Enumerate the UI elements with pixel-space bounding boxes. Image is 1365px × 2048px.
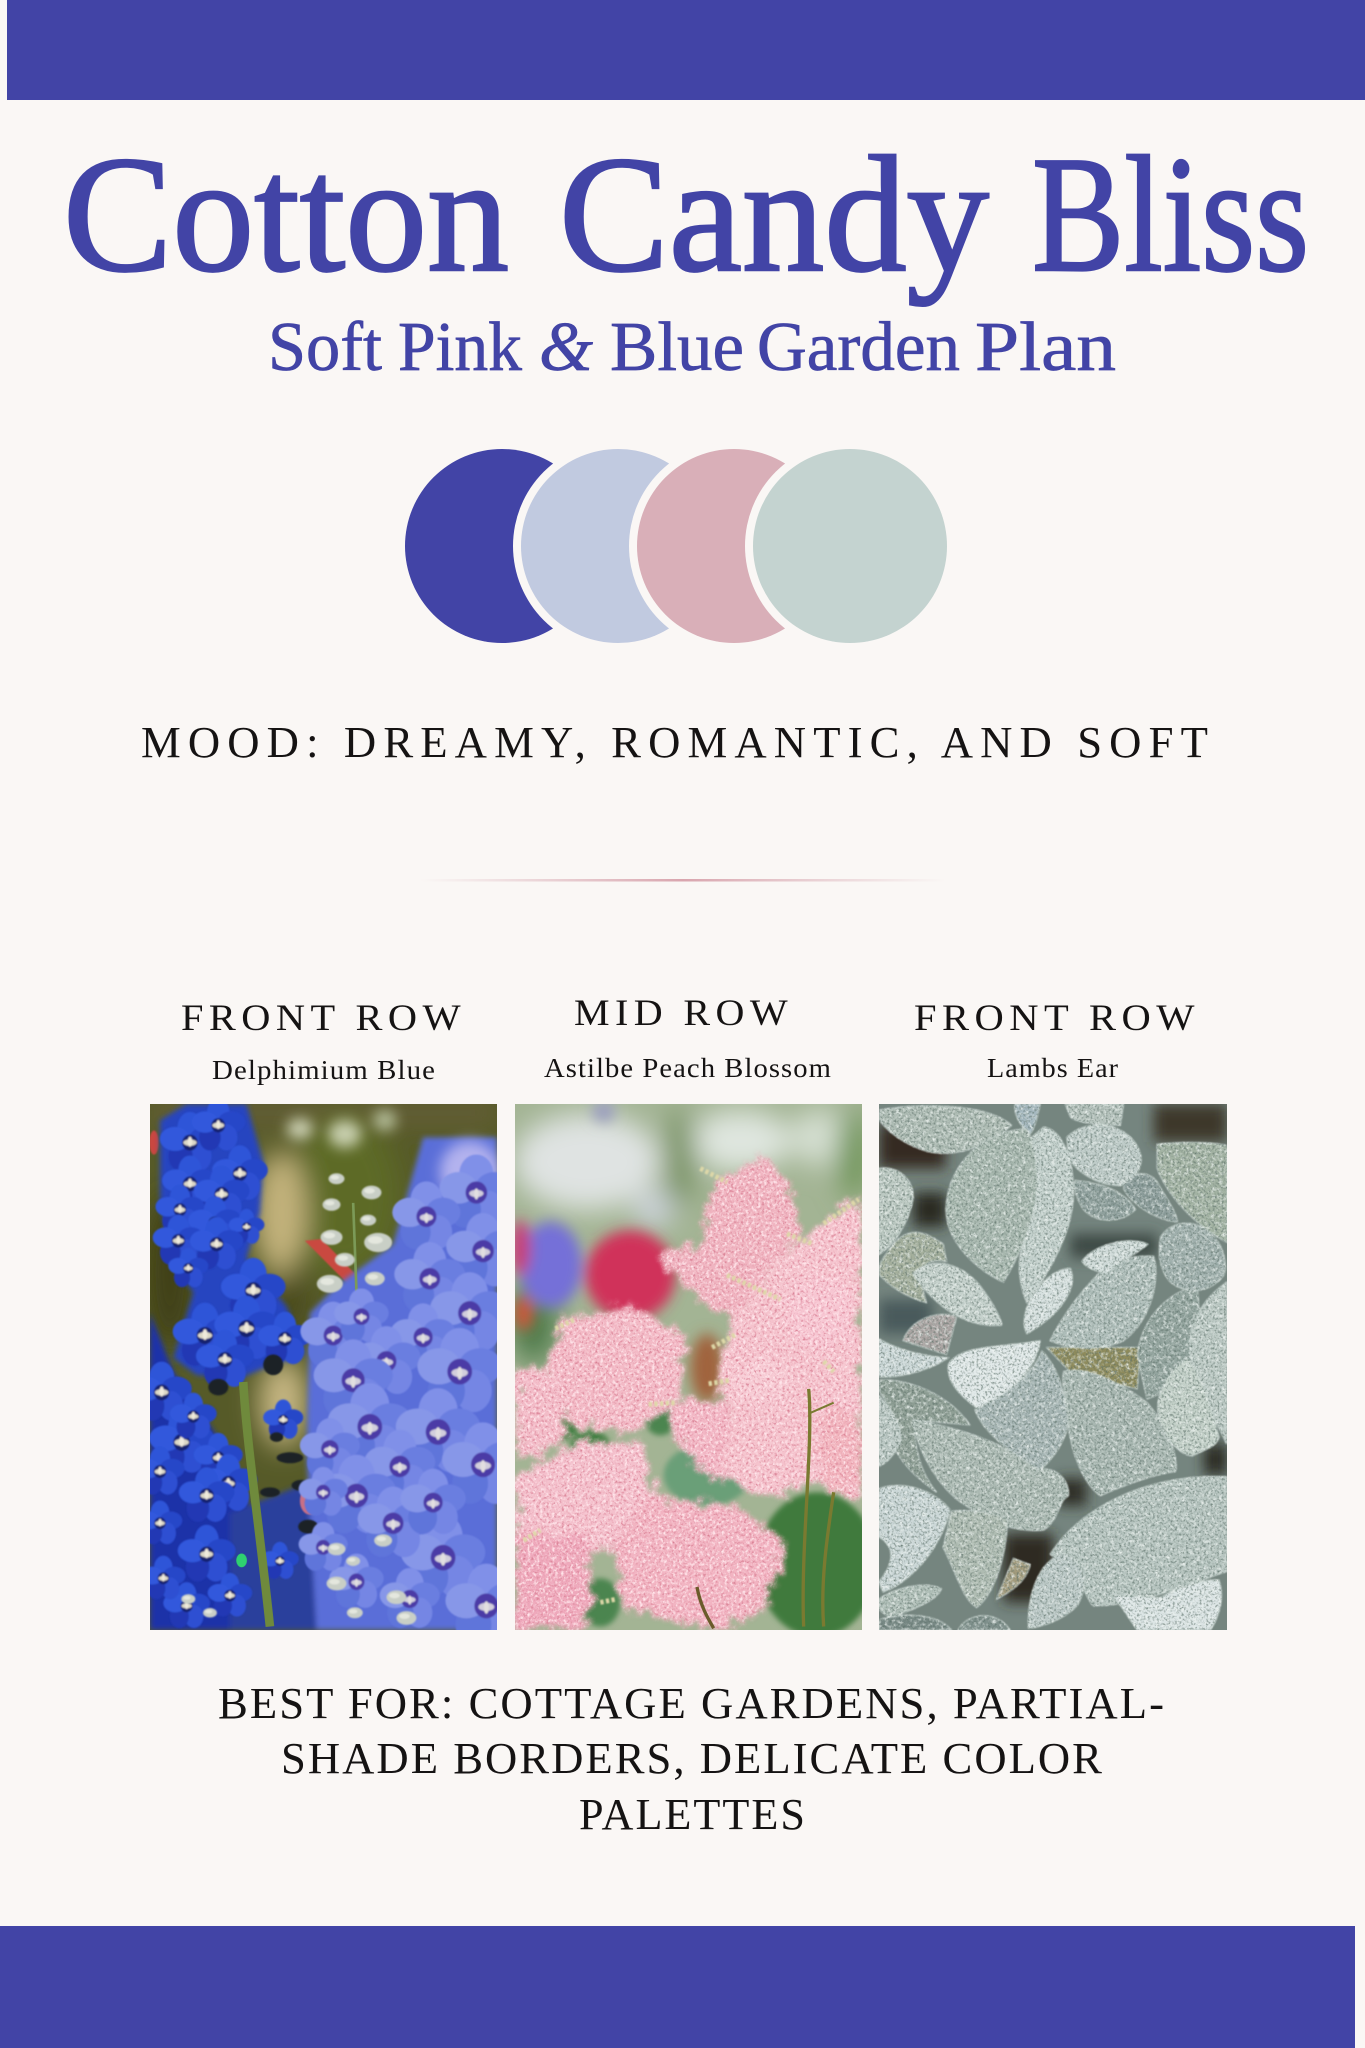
stems (697, 1389, 834, 1628)
pale buds on plumes (524, 1168, 859, 1602)
subtitle: Garden (757, 309, 960, 386)
silver leaves (879, 1104, 1227, 1630)
subtitle: & (539, 309, 594, 386)
subtitle: Soft (268, 309, 383, 386)
column heading: front row left (181, 998, 466, 1085)
title: Candy (559, 122, 989, 306)
subtitle (268, 309, 1116, 386)
photo: delphinium (150, 1104, 497, 1630)
photo: lambs ear (879, 1104, 1227, 1630)
column heading: front row right: FRONT ROW (914, 998, 1200, 1039)
mood line: MOOD: DREAMY, ROMANTIC, AND SOFT (141, 718, 1215, 767)
column heading: mid row: MID ROW (574, 993, 793, 1034)
column heading: front row left: Delphimium Blue (212, 1055, 436, 1085)
best-for description: BEST FOR: COTTAGE GARDENS, PARTIAL- (218, 1679, 1166, 1728)
subtitle: Plan (975, 309, 1116, 386)
column heading: front row right (914, 998, 1200, 1083)
bottom banner (0, 1926, 1355, 2048)
stem side shoots (208, 1354, 320, 1534)
top banner (7, 0, 1365, 100)
title: Bliss (1032, 122, 1309, 306)
title (63, 122, 1309, 306)
subtitle: Pink (398, 309, 522, 386)
stem (243, 1382, 270, 1627)
column heading: mid row (544, 993, 832, 1083)
column heading: front row left: FRONT ROW (181, 998, 466, 1039)
pale buds (181, 1173, 416, 1625)
pink astilbe plumes (515, 1155, 800, 1630)
light delphinium florets (299, 1154, 527, 1645)
best-for description: PALETTES (579, 1790, 807, 1839)
photo: astilbe (515, 1104, 862, 1630)
best-for description: SHADE BORDERS, DELICATE COLOR (281, 1734, 1104, 1783)
column heading: front row right: Lambs Ear (987, 1053, 1119, 1083)
best-for description (218, 1679, 1166, 1839)
dark delphinium florets (132, 1098, 312, 1628)
subtitle: Blue (610, 309, 744, 386)
title: Cotton (63, 122, 509, 306)
colour palette circles (405, 441, 955, 651)
column heading: mid row: Astilbe Peach Blossom (544, 1053, 832, 1083)
